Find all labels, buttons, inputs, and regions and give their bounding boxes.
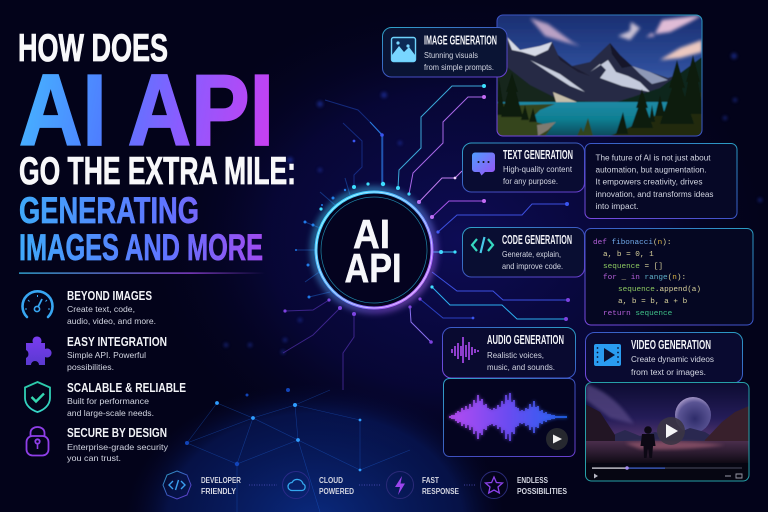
badge: developer friendly: [163, 471, 242, 499]
panel: code sample: def fibonacci(n):: [593, 239, 671, 247]
badge: cloud powered: [282, 472, 354, 498]
feature: secure by design: SECURE BY DESIGN: [67, 426, 167, 440]
panel: audio generation: music, and sounds.: [487, 362, 555, 372]
panel: code sample: for _ in range(n):: [603, 274, 686, 282]
feature: secure by design: you can trust.: [67, 453, 121, 463]
panel: text sample: into impact.: [596, 201, 638, 211]
panel: video generation: Create dynamic videos: [631, 354, 714, 364]
badge: fast response: RESPONSE: [422, 486, 459, 496]
play button: [657, 417, 685, 445]
icon: puzzle piece: [26, 336, 52, 365]
panel: image generation: Stunning visuals: [424, 50, 478, 60]
title: GENERATING: [19, 190, 199, 231]
icon: shield: [25, 382, 50, 412]
panel: code generation: CODE GENERATION: [502, 233, 572, 247]
astronaut: [640, 426, 656, 458]
panel: text sample: [585, 144, 737, 218]
icon: chat bubble: [472, 152, 495, 176]
icon: film play: [594, 344, 621, 366]
hub label: API: [344, 245, 402, 291]
icon: picture: [392, 38, 416, 62]
circuit lines: [283, 84, 570, 390]
icon: gauge: [23, 291, 52, 317]
panel: text sample: The future of AI is not just about: [596, 152, 711, 162]
waveform: [450, 393, 566, 441]
feature: beyond images: audio, video, and more.: [67, 316, 156, 326]
badge: endless possibilities: ENDLESS: [517, 475, 548, 485]
feature: secure by design: Enterprise-grade security: [67, 442, 169, 452]
panel: code generation: [462, 228, 584, 277]
feature: easy integration: EASY INTEGRATION: [67, 335, 167, 349]
hub: AI API circle: [314, 190, 434, 310]
feature: beyond images: [23, 289, 156, 326]
panel: video generation: VIDEO GENERATION: [631, 338, 711, 352]
badge: developer friendly: DEVELOPER: [201, 475, 242, 485]
play button: [546, 428, 568, 450]
feature: beyond images: Create text, code,: [67, 304, 135, 314]
panel: text sample: innovation, and transforms ideas: [596, 189, 714, 199]
panel: image generation: from simple prompts.: [424, 62, 494, 72]
panel: code sample: a, b = 0, 1: [603, 251, 654, 259]
feature: scalable and reliable: Built for performance: [67, 396, 149, 406]
panel: video generation: from text or images.: [631, 367, 706, 377]
feature: scalable and reliable: SCALABLE & RELIABLE: [67, 381, 186, 395]
badge: cloud powered: POWERED: [319, 486, 354, 496]
panel: code sample: sequence.append(a): [618, 286, 701, 294]
badge: fast response: [386, 472, 459, 498]
icon: padlock: [26, 427, 48, 456]
panel: image generation: [382, 28, 507, 77]
panel: code generation: and improve code.: [502, 261, 563, 271]
panel: audio generation: [442, 328, 576, 378]
badge: endless possibilities: POSSIBILITIES: [517, 486, 567, 496]
hub label: AI: [353, 211, 390, 257]
feature: secure by design: [26, 426, 169, 463]
title: [18, 27, 296, 268]
progress bar: [592, 466, 742, 478]
feature: easy integration: Simple API. Powerful: [67, 350, 146, 360]
panel: text generation: [462, 143, 584, 192]
panel: audio generation: Realistic voices,: [487, 350, 544, 360]
bottom strip: [163, 471, 567, 499]
panel: text generation: High-quality content: [503, 164, 573, 174]
badge: cloud powered: CLOUD: [319, 475, 343, 485]
badge: fast response: FAST: [422, 475, 440, 485]
panel: code sample: [585, 228, 753, 325]
feature: beyond images: BEYOND IMAGES: [67, 289, 152, 303]
panel: audio waveform: [444, 378, 575, 456]
panel: video player: [585, 382, 749, 481]
title: IMAGES AND MORE: [19, 227, 263, 268]
feature: easy integration: [26, 335, 167, 372]
panel: code sample: sequence = []: [603, 263, 663, 271]
globe network: [125, 380, 505, 512]
panel: text generation: TEXT GENERATION: [503, 148, 573, 162]
picture: mountain lake: [497, 15, 704, 136]
feature: scalable and reliable: [25, 381, 186, 418]
panel: text sample: automation, but augmentation.: [596, 164, 706, 174]
panel: audio generation: AUDIO GENERATION: [487, 333, 564, 347]
icon: sound wave: [452, 337, 478, 363]
badge: endless possibilities: [480, 472, 567, 498]
panel: text generation: for any purpose.: [503, 176, 558, 186]
hub label: [344, 211, 402, 291]
title: HOW DOES: [18, 27, 168, 70]
title: AI API: [19, 55, 274, 167]
panel: video generation: [586, 332, 742, 383]
panel: code generation: Generate, explain,: [502, 249, 561, 259]
badge: developer friendly: FRIENDLY: [201, 486, 236, 496]
feature: scalable and reliable: and large-scale needs.: [67, 408, 154, 418]
panel: code sample: a, b = b, a + b: [618, 298, 688, 306]
panel: text sample: It empowers creativity, drives: [596, 176, 702, 186]
icon: code brackets: [472, 237, 493, 253]
panel: code sample: return sequence: [603, 310, 673, 318]
feature: easy integration: possibilities.: [67, 362, 114, 372]
panel: image generation: IMAGE GENERATION: [424, 34, 497, 48]
title: GO THE EXTRA MILE:: [19, 150, 296, 193]
